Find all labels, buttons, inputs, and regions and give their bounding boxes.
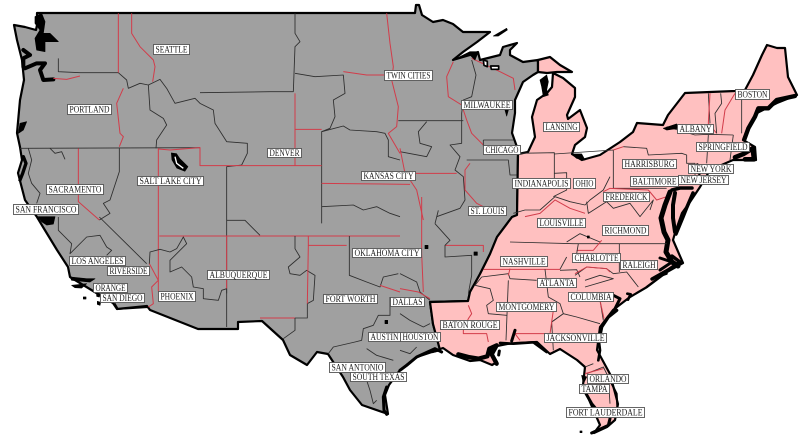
pink eastern region <box>430 45 797 433</box>
black coastal inlets of the mid-Atlantic <box>652 188 693 279</box>
label: St. Louis: ST. LOUIS <box>470 206 504 216</box>
label: Baton Rouge: BATON ROUGE <box>442 320 498 330</box>
pink upper Michigan <box>538 57 572 73</box>
label: Baltimore: BALTIMORE <box>632 177 677 187</box>
label: Milwaukee: MILWAUKEE <box>464 100 511 110</box>
label: South Texas: SOUTH TEXAS <box>352 372 404 382</box>
label: Nashville: NASHVILLE <box>502 257 546 267</box>
label: Harrisburg: HARRISBURG <box>624 159 675 169</box>
label: Ohio: OHIO <box>576 179 594 189</box>
label: Indianapolis: INDIANAPOLIS <box>514 179 568 189</box>
midwest and northeast boundaries <box>390 28 795 220</box>
label: Atlanta: ATLANTA <box>540 278 575 288</box>
label: Raleigh: RALEIGH <box>622 260 656 270</box>
black water bodies on the west coast <box>18 13 188 225</box>
label: Albuquerque: ALBUQUERQUE <box>210 270 268 280</box>
label: Albany: ALBANY <box>680 124 712 134</box>
label: Riverside: RIVERSIDE <box>110 266 148 276</box>
label: Louisville: LOUISVILLE <box>540 218 584 228</box>
label: Dallas: DALLAS <box>392 297 422 307</box>
label: Montgomery: MONTGOMERY <box>498 302 555 312</box>
label: Phoenix: PHOENIX <box>160 292 194 302</box>
label: Denver: DENVER <box>270 148 300 158</box>
label: Austin: AUSTIN <box>370 332 399 342</box>
label: San Francisco: SAN FRANCISCO <box>16 205 77 215</box>
label: Springfield: SPRINGFIELD <box>698 142 748 152</box>
label: New Jersey: NEW JERSEY <box>680 175 727 185</box>
label: Richmond: RICHMOND <box>604 226 647 236</box>
label: Los Angeles: LOS ANGELES <box>72 256 124 266</box>
label: Frederick: FREDERICK <box>606 192 648 202</box>
label: Fort Worth: FORT WORTH <box>326 294 376 304</box>
label: Fort Lauderdale: FORT LAUDERDALE <box>568 408 643 418</box>
label: Orange: ORANGE <box>96 283 126 293</box>
label: Orlando: ORLANDO <box>590 374 627 384</box>
label: Lansing: LANSING <box>546 122 578 132</box>
label: Houston: HOUSTON <box>402 332 439 342</box>
label: San Diego: SAN DIEGO <box>102 293 143 303</box>
label: Charlotte: CHARLOTTE <box>574 253 619 263</box>
label: Sacramento: SACRAMENTO <box>48 185 102 195</box>
gray western and central region <box>14 5 538 414</box>
southeast boundaries <box>383 197 667 433</box>
label: Kansas City: KANSAS CITY <box>364 171 414 181</box>
label: Twin Cities: TWIN CITIES <box>386 71 430 81</box>
label: Portland: PORTLAND <box>70 105 110 115</box>
southwest boundaries <box>58 217 400 404</box>
label: Boston: BOSTON <box>738 90 768 100</box>
label: Salt Lake City: SALT LAKE CITY <box>140 176 202 186</box>
label: Tampa: TAMPA <box>582 384 608 394</box>
label: Jacksonville: JACKSONVILLE <box>546 333 605 343</box>
label: New York: NEW YORK <box>690 164 732 174</box>
label: Columbia: COLUMBIA <box>570 292 612 302</box>
label: Chicago: CHICAGO <box>486 145 519 155</box>
label: Oklahoma City: OKLAHOMA CITY <box>354 248 420 258</box>
west boundaries <box>20 13 410 293</box>
label: San Antonio: SAN ANTONIO <box>332 363 384 373</box>
label: Seattle: SEATTLE <box>156 45 188 55</box>
